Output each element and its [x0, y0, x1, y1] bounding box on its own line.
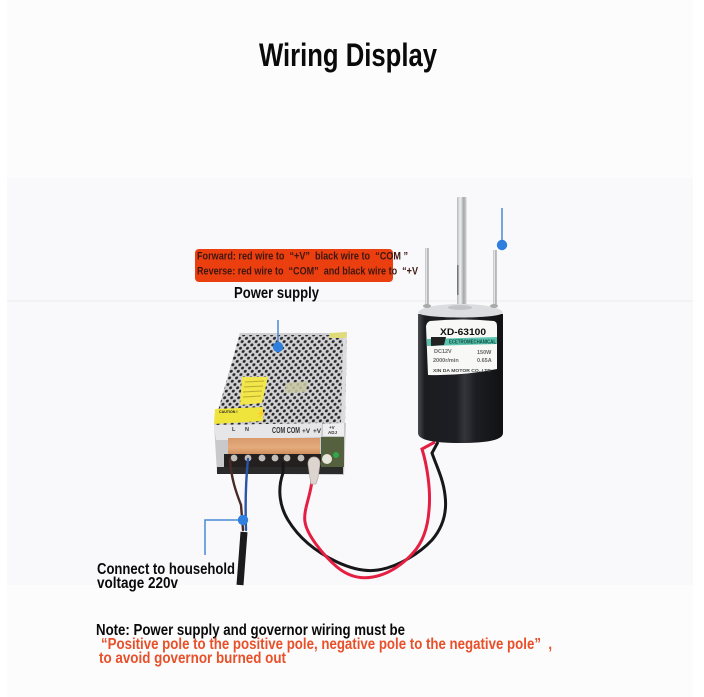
caution label: CAUTION ! — [219, 410, 238, 414]
motor label: 150W — [477, 350, 492, 356]
mains connection label: Connect to household — [97, 561, 235, 578]
terminal label strip — [214, 423, 344, 440]
black wire — [280, 442, 446, 571]
red crimp terminal — [308, 457, 320, 484]
power supply unit — [214, 332, 347, 475]
terminal label strip: N — [245, 427, 249, 433]
motor label: XD-63100 — [440, 327, 486, 337]
power supply label: Power supply — [234, 285, 319, 302]
pointer: motor — [497, 208, 507, 250]
pointer: mains input — [205, 515, 248, 555]
left pin — [425, 248, 429, 306]
terminal label strip: COM COM — [272, 426, 300, 435]
motor label: 0.65A — [477, 358, 492, 364]
yellow warning label — [240, 377, 268, 405]
caution label — [214, 407, 266, 424]
right pin — [493, 250, 497, 306]
terminal label strip: ADJ — [328, 430, 337, 435]
title: Wiring Display — [259, 37, 437, 73]
output shaft — [457, 197, 466, 309]
wiring instruction callout — [195, 249, 419, 282]
wiring instruction callout: Reverse: red wire to “COM” and black wire to “+V — [197, 266, 419, 278]
front panel — [214, 423, 346, 475]
wiring note — [96, 622, 552, 667]
motor label: DC12V — [434, 349, 452, 355]
caution label: ⚡ — [256, 408, 266, 418]
motor label: 2000r/min — [433, 358, 459, 364]
terminal label strip: +V — [313, 428, 322, 435]
wiring note: to avoid governor burned out — [99, 650, 287, 667]
mains connection label: voltage 220v — [97, 575, 178, 592]
terminal label strip: +V — [329, 425, 335, 430]
terminal label strip: L — [232, 427, 236, 433]
screw terminals — [228, 438, 320, 454]
circuit board — [321, 437, 344, 467]
wiring note: “Positive pole to the positive pole, negative pole to the negative pole” , — [101, 636, 552, 653]
motor label — [426, 320, 497, 375]
wiring note: Note: Power supply and governor wiring must be — [96, 622, 405, 639]
motor label: XIN DA MOTOR CO.,LTD — [433, 368, 492, 374]
motor end cap — [418, 304, 503, 318]
motor body — [418, 314, 503, 443]
motor label: ECETROMECHANICAL — [449, 340, 497, 346]
wiring instruction callout: Forward: red wire to “+V” black wire to “COM ” — [197, 250, 408, 262]
terminal label strip: +V — [302, 428, 311, 435]
perforated top cover — [214, 333, 347, 425]
red wire — [305, 442, 435, 578]
pointer: power supply — [273, 320, 283, 352]
mains input wires — [230, 459, 248, 585]
mains connection label — [97, 561, 235, 592]
DC motor — [418, 197, 503, 443]
